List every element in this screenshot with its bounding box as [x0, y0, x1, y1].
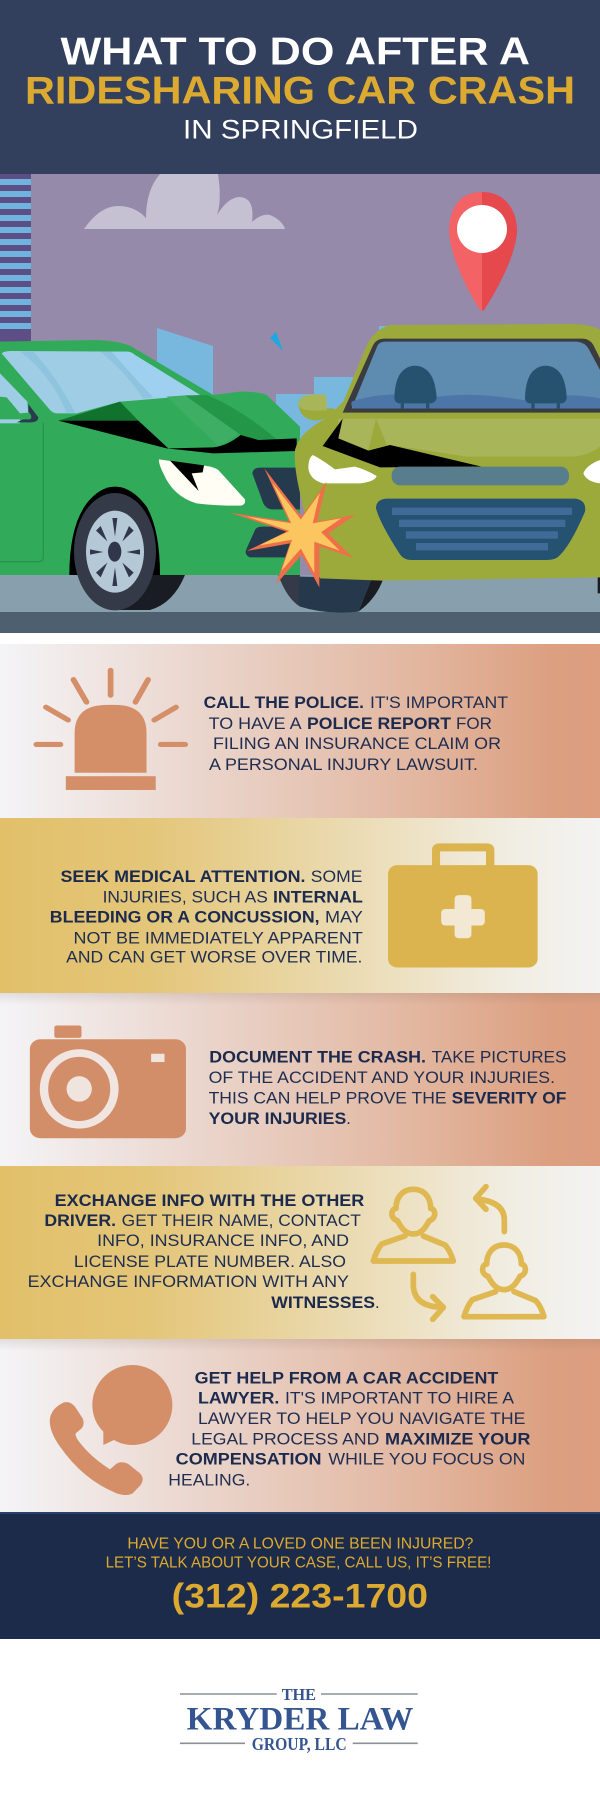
- footer logo: [180, 1685, 418, 1754]
- collision starburst: [230, 468, 355, 587]
- text: document the crash: OF THE ACCIDENT AND YOUR INJURIES.: [209, 1069, 555, 1087]
- text: seek medical attention: INTERNAL: [273, 888, 363, 906]
- panel: call the police: [0, 644, 600, 818]
- road: [0, 575, 600, 633]
- panel: exchange info: [0, 1166, 600, 1339]
- text: get legal help: LAWYER.: [198, 1389, 279, 1407]
- text: exchange info: EXCHANGE INFORMATION WITH ANY: [28, 1273, 349, 1291]
- icon: location pin: [449, 192, 517, 311]
- text: document the crash: THIS CAN HELP PROVE THE: [209, 1089, 447, 1107]
- text: get legal help: [168, 1369, 530, 1489]
- text: seek medical attention: NOT BE IMMEDIATELY APPARENT: [74, 929, 363, 947]
- icon: camera: [30, 1025, 186, 1138]
- text: exchange info: [28, 1192, 380, 1312]
- footer logo: GROUP, LLC: [252, 1734, 347, 1754]
- olive car: [230, 324, 600, 613]
- hero illustration: car crash: [0, 174, 600, 633]
- text: call the police: FILING AN INSURANCE CLAIM OR: [213, 735, 501, 753]
- panel: seek medical attention: [0, 818, 600, 993]
- text: seek medical attention: INJURIES, SUCH AS: [103, 888, 268, 906]
- text: seek medical attention: SEEK MEDICAL ATTENTION.: [60, 868, 306, 886]
- text: document the crash: DOCUMENT THE CRASH.: [209, 1048, 426, 1066]
- speech bubble: [92, 1365, 172, 1445]
- text: exchange info: LICENSE PLATE NUMBER. ALSO: [74, 1253, 346, 1271]
- green car: [0, 340, 300, 610]
- icon: first aid kit: [388, 843, 538, 968]
- text: call the police: TO HAVE A: [209, 715, 302, 733]
- front grille: [376, 499, 585, 560]
- background buildings: [157, 326, 387, 440]
- call to action panel: [0, 1512, 600, 1639]
- text: call the police: IT'S IMPORTANT: [370, 694, 508, 712]
- text: get legal help: MAXIMIZE YOUR: [385, 1430, 530, 1448]
- phone number: (312) 223-1700: [172, 1578, 428, 1616]
- subtitle: IN SPRINGFIELD: [183, 114, 418, 144]
- cloud: [84, 174, 285, 229]
- text: exchange info: DRIVER.: [44, 1212, 116, 1230]
- text: get legal help: IT'S IMPORTANT TO HIRE A: [285, 1389, 514, 1407]
- text: get legal help: LEGAL PROCESS AND: [191, 1430, 379, 1448]
- text: call the police: FOR: [456, 715, 492, 733]
- icon: small blue triangle: [270, 332, 283, 351]
- text: call the police: [204, 694, 508, 774]
- text: seek medical attention: AND CAN GET WORSE OVER TIME.: [66, 949, 362, 967]
- panel: document the crash: [0, 993, 600, 1166]
- panel: get legal help: [0, 1339, 600, 1512]
- text: document the crash: YOUR INJURIES: [209, 1110, 346, 1128]
- text: get legal help: COMPENSATION: [176, 1451, 322, 1469]
- text: exchange info: EXCHANGE INFO WITH THE OTHER: [55, 1192, 364, 1210]
- text: get legal help: HEALING.: [168, 1471, 250, 1489]
- call to action text: LET’S TALK ABOUT YOUR CASE, CALL US, IT’S FREE!: [106, 1555, 491, 1572]
- title line 1: WHAT TO DO AFTER A: [60, 30, 530, 73]
- windshield: [343, 339, 600, 413]
- text: document the crash: TAKE PICTURES: [432, 1048, 566, 1066]
- text: seek medical attention: BLEEDING OR A CONCUSSION,: [50, 908, 320, 926]
- text: exchange info: WITNESSES: [271, 1294, 375, 1312]
- footer logo: KRYDER LAW: [187, 1701, 413, 1737]
- header panel: [0, 0, 600, 174]
- icon: two people exchanging: [373, 1187, 544, 1319]
- side mirror: [298, 394, 343, 421]
- arrow: up-left: [476, 1187, 504, 1232]
- striped building: [0, 174, 31, 344]
- text: call the police: A PERSONAL INJURY LAWSUIT.: [209, 756, 478, 774]
- person two: [464, 1245, 544, 1317]
- text: document the crash: SEVERITY OF: [452, 1089, 566, 1107]
- text: exchange info: INFO, INSURANCE INFO, AND: [97, 1232, 349, 1250]
- text: call the police: POLICE REPORT: [307, 715, 451, 733]
- text: seek medical attention: [50, 868, 363, 967]
- icon: phone and speech bubble: [50, 1365, 172, 1495]
- arrow: down-right: [413, 1274, 443, 1319]
- text: get legal help: WHILE YOU FOCUS ON: [328, 1451, 525, 1469]
- front wheel: [69, 487, 185, 610]
- text: document the crash: .: [346, 1110, 351, 1128]
- handset: [50, 1402, 143, 1495]
- text: exchange info: GET THEIR NAME, CONTACT: [122, 1212, 361, 1230]
- call to action text: [106, 1535, 491, 1572]
- text: seek medical attention: MAY: [325, 908, 363, 926]
- text: get legal help: GET HELP FROM A CAR ACCIDENT: [195, 1369, 498, 1387]
- text: exchange info: .: [375, 1294, 380, 1312]
- text: seek medical attention: SOME: [311, 868, 362, 886]
- icon: siren: [36, 670, 185, 790]
- footer logo: THE: [282, 1685, 316, 1704]
- title line 2: RIDESHARING CAR CRASH: [25, 70, 575, 112]
- text: call the police: CALL THE POLICE.: [204, 694, 364, 712]
- call to action text: HAVE YOU OR A LOVED ONE BEEN INJURED?: [127, 1535, 473, 1552]
- text: document the crash: [209, 1048, 566, 1128]
- text: get legal help: LAWYER TO HELP YOU NAVIGATE THE: [198, 1410, 525, 1428]
- person one: [373, 1189, 453, 1261]
